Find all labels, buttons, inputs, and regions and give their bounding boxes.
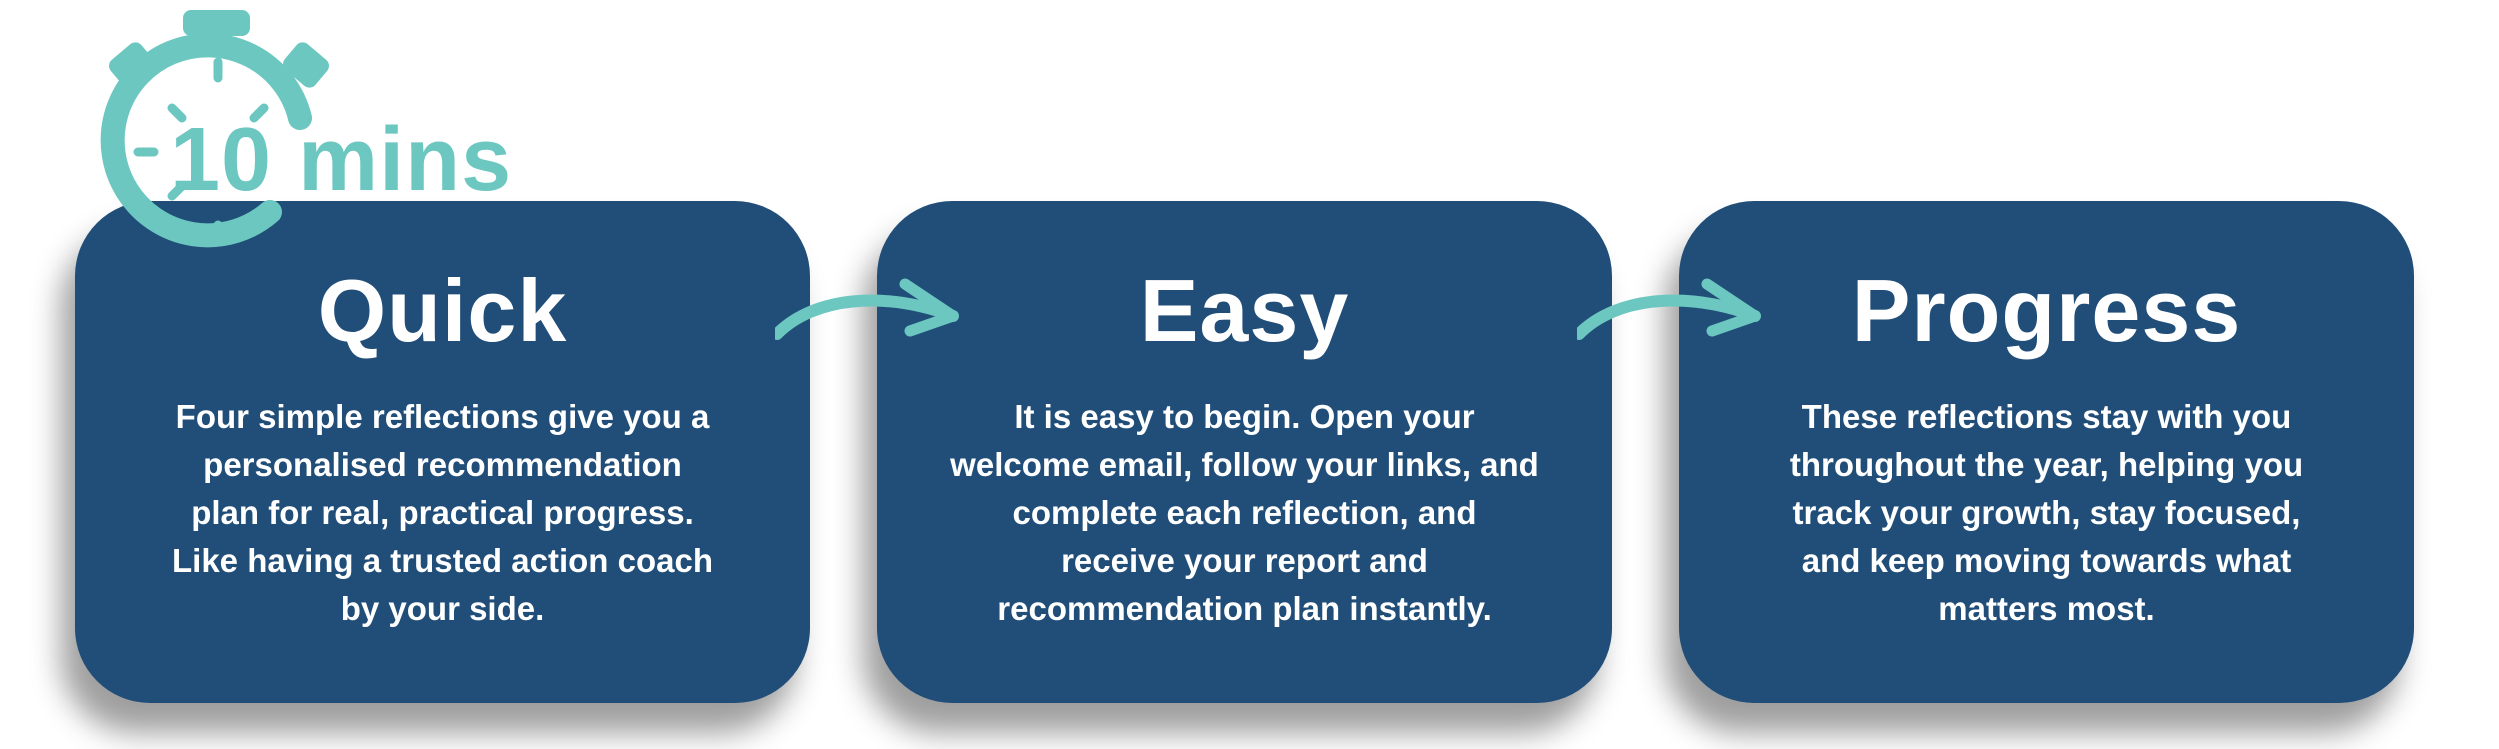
- text: easy description: recommendation plan instantly.: [997, 590, 1492, 627]
- heading: Progress: Progress: [1852, 261, 2241, 360]
- heading: Quick: Quick: [318, 261, 567, 360]
- text: quick description: plan for real, practical progress.: [191, 494, 694, 531]
- text: easy description: receive your report and: [1061, 542, 1428, 579]
- text: progress description: and keep moving towards what: [1802, 542, 2291, 579]
- arrow: quick to easy: [775, 278, 959, 340]
- arrow: easy to progress: [1577, 278, 1761, 340]
- text: easy description: welcome email, follow your links, and: [950, 446, 1539, 483]
- text: progress description: [1790, 398, 2303, 627]
- text: progress description: throughout the year, helping you: [1790, 446, 2303, 483]
- text: quick description: by your side.: [341, 590, 544, 627]
- text: easy description: complete each reflection, and: [1013, 494, 1476, 531]
- panel: progress: [1679, 201, 2414, 703]
- icon: stopwatch 10 mins: [100, 10, 512, 248]
- text: quick description: Like having a trusted action coach: [172, 542, 713, 579]
- icon: stopwatch 10 mins: 10 mins: [170, 110, 512, 210]
- text: easy description: It is easy to begin. Open your: [1014, 398, 1475, 435]
- heading: Easy: Easy: [1140, 261, 1349, 360]
- text: quick description: Four simple reflections give you a: [176, 398, 709, 435]
- text: progress description: matters most.: [1938, 590, 2155, 627]
- text: progress description: track your growth, stay focused,: [1793, 494, 2300, 531]
- panel: easy: [877, 201, 1612, 703]
- panel: quick: [75, 201, 810, 703]
- text: quick description: [172, 398, 713, 627]
- text: easy description: [950, 398, 1539, 627]
- text: quick description: personalised recommendation: [203, 446, 682, 483]
- text: progress description: These reflections stay with you: [1802, 398, 2291, 435]
